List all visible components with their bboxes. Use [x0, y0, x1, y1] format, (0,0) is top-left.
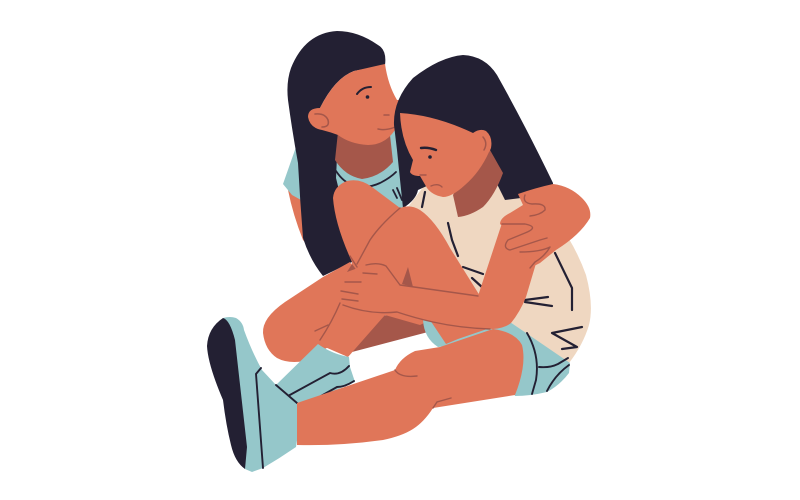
back girl far arm	[288, 190, 312, 250]
front girl neck shadow	[453, 150, 503, 217]
front girl hair	[394, 55, 553, 208]
back girl torso shirt	[330, 130, 406, 215]
far shorts	[423, 310, 495, 347]
back girl thigh	[263, 262, 365, 362]
shoe sole	[207, 318, 247, 469]
back girl arm and hand on shoulder	[500, 184, 590, 268]
back girl face	[308, 64, 402, 145]
shadow at wrist	[347, 264, 413, 287]
back girl	[283, 31, 406, 276]
shoe	[207, 317, 299, 472]
back girl neck shadow	[335, 132, 393, 179]
front girl raised leg	[315, 180, 480, 357]
near shorts	[490, 322, 570, 396]
shoe upper	[223, 317, 299, 472]
back girl hair	[287, 31, 385, 276]
front girl face	[400, 113, 491, 197]
shoe lines	[256, 368, 297, 468]
thigh under arm	[430, 305, 490, 344]
shadow under raised leg	[352, 315, 430, 352]
back girl sleeve	[283, 147, 310, 205]
sock	[276, 344, 355, 403]
front girl extended leg	[297, 329, 523, 445]
front girl arm and hand	[340, 200, 540, 329]
front girl shirt	[408, 170, 591, 363]
